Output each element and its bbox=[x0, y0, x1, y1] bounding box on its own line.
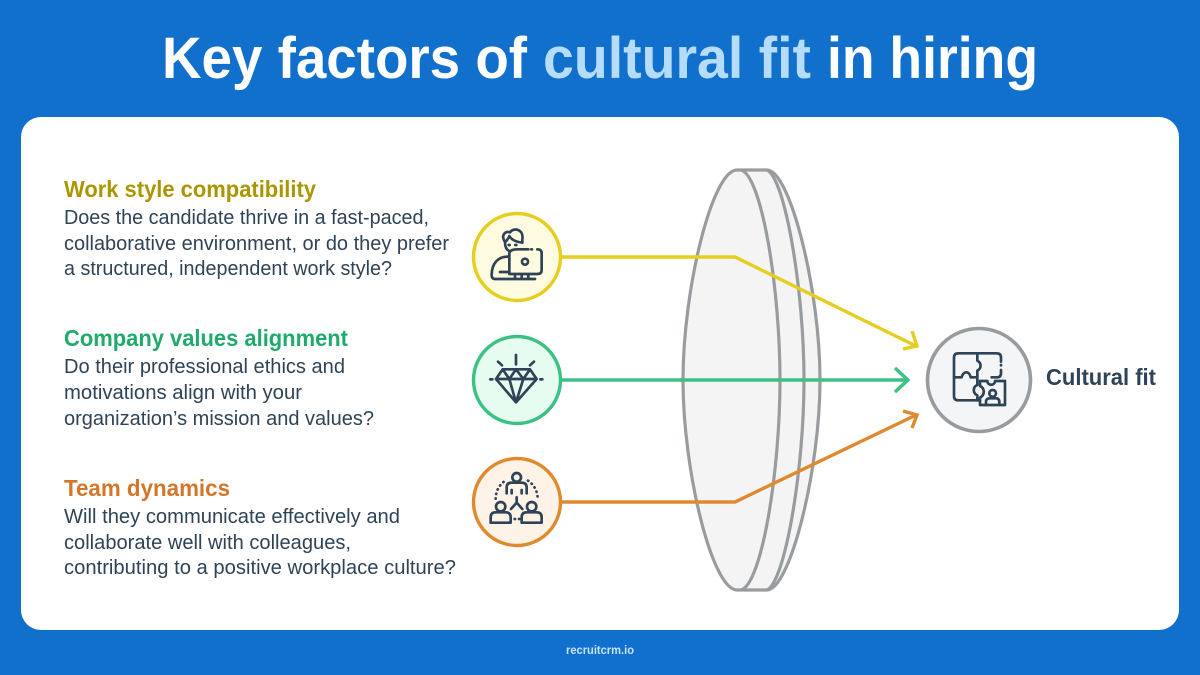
arrow: team dynamics to cultural fit bbox=[561, 411, 917, 502]
arrow: work style to cultural fit bbox=[561, 257, 917, 349]
icon: person with laptop bbox=[474, 214, 560, 300]
panel: main card bbox=[21, 117, 1179, 630]
text block: company values alignment bbox=[64, 325, 374, 430]
text block: work style compatibility: collaborative environment, or do they prefer bbox=[64, 233, 449, 255]
text block: team dynamics: contributing to a positive workplace culture? bbox=[64, 557, 456, 579]
text block: company values alignment: Company values alignment bbox=[64, 325, 348, 351]
text block: work style compatibility: Does the candidate thrive in a fast-paced, bbox=[64, 207, 429, 229]
text block: team dynamics: Team dynamics bbox=[64, 475, 230, 501]
text block: company values alignment: motivations align with your bbox=[64, 382, 302, 404]
text block: team dynamics: Will they communicate effectively and bbox=[64, 506, 400, 528]
icon: cultural fit puzzle bbox=[928, 328, 1030, 432]
text block: team dynamics bbox=[64, 475, 456, 579]
text block: company values alignment: organization’s mission and values? bbox=[64, 408, 374, 430]
text block: work style compatibility: a structured, independent work style? bbox=[64, 258, 392, 280]
arrow: company values to cultural fit bbox=[561, 368, 908, 392]
text block: team dynamics: collaborate well with colleagues, bbox=[64, 532, 351, 554]
icon: diamond bbox=[474, 336, 560, 424]
title: cultural fit bbox=[543, 26, 811, 91]
text block: work style compatibility: Work style compatibility bbox=[64, 176, 316, 202]
title: in hiring bbox=[827, 26, 1038, 91]
title: Key factors of bbox=[162, 26, 528, 91]
lens bbox=[683, 170, 820, 590]
label: cultural fit: Cultural fit bbox=[1046, 364, 1156, 390]
text block: work style compatibility bbox=[64, 176, 449, 280]
footer: recruitcrm.io: recruitcrm.io bbox=[566, 643, 634, 657]
title bbox=[162, 26, 1038, 91]
text block: company values alignment: Do their professional ethics and bbox=[64, 356, 345, 378]
icon: team bbox=[474, 458, 560, 546]
